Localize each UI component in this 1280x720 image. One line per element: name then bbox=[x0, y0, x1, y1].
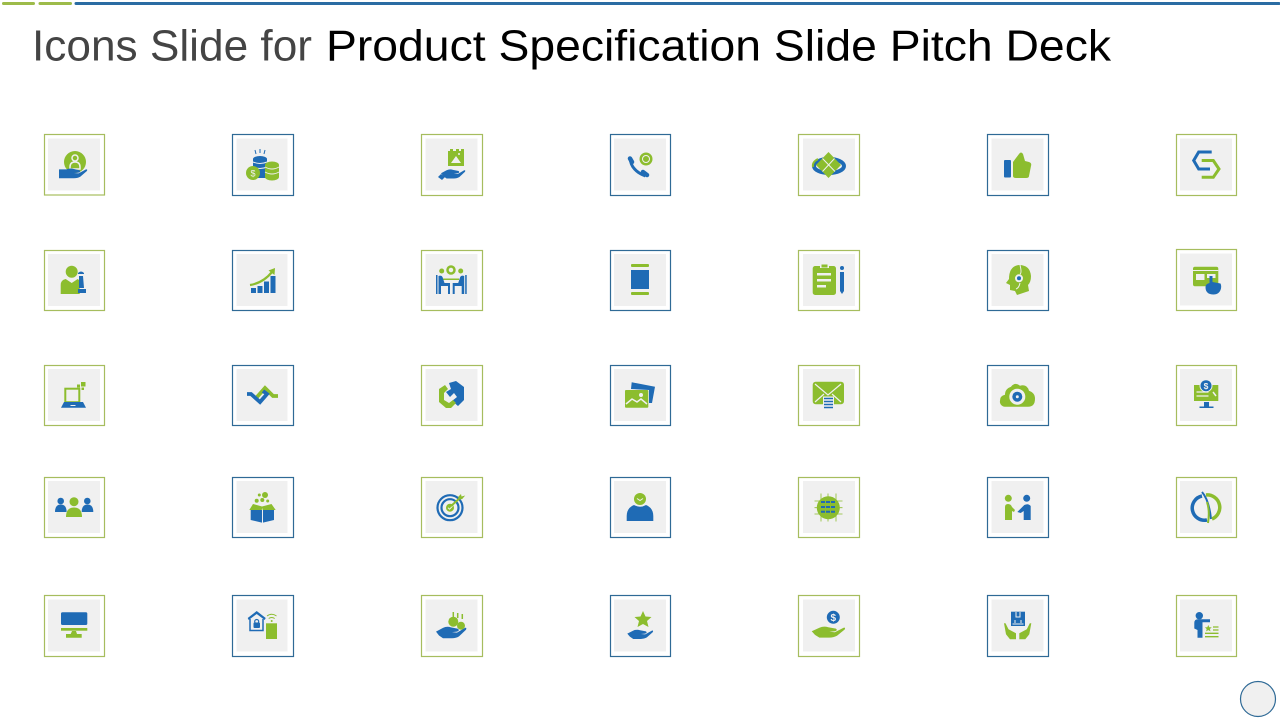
icon: phone with gear bbox=[610, 134, 670, 196]
icon: hand holding star bbox=[610, 596, 670, 656]
page number circle bbox=[1240, 682, 1276, 716]
icon: browser with pointing hand bbox=[1176, 250, 1236, 310]
icon: monitor with dollar coin: $ bbox=[1204, 381, 1209, 391]
icon: headset support head bbox=[988, 250, 1048, 310]
icon: hand with dollar coin bbox=[798, 596, 860, 656]
icon: diamonds over ellipse bbox=[798, 134, 860, 196]
title: Product Specification Slide Pitch Deck bbox=[326, 22, 1112, 70]
icon: hand holding user bbox=[44, 134, 104, 195]
icon: hand holding calendar image bbox=[422, 134, 482, 196]
icon: photo cards with star bbox=[610, 366, 670, 426]
icon: interlinked zigzag arrows bbox=[232, 366, 294, 426]
icon: clipboard and pen bbox=[798, 250, 860, 310]
icon: person with chess piece bbox=[44, 250, 104, 310]
icon: monitor with dollar coin bbox=[1176, 366, 1236, 426]
icon: cloud with gear bbox=[988, 366, 1048, 426]
icon: hands holding parcel bbox=[988, 596, 1048, 656]
icon: hand with dollar coin: $ bbox=[831, 613, 837, 624]
icon: open box with dots bbox=[232, 478, 294, 538]
icon: two people shaking hands bbox=[988, 478, 1048, 538]
icon: meeting table with chairs bbox=[422, 250, 482, 310]
icon: envelope with list bbox=[798, 366, 860, 426]
icon: coin stacks with dollar: $ bbox=[250, 168, 256, 178]
icon: target with arrow bbox=[422, 478, 482, 538]
icon: presenter with list bbox=[1176, 596, 1236, 656]
icon: hexagon arrows bbox=[422, 366, 482, 426]
icon: coin stacks with dollar bbox=[232, 134, 294, 196]
icon: circuit chip with list bbox=[798, 478, 860, 538]
icon: thumbs up bbox=[988, 134, 1048, 196]
icon: hexagonal S bbox=[1176, 134, 1236, 196]
icon: smart home lock with phone bbox=[232, 596, 294, 656]
icon: tablet bbox=[610, 250, 670, 310]
title bbox=[32, 22, 1112, 70]
icon: circular leaf arcs bbox=[1176, 478, 1236, 538]
icon: rising bar chart bbox=[232, 250, 294, 310]
top accent bars bbox=[2, 2, 1280, 5]
icon: person bust bbox=[610, 478, 670, 538]
title: Icons Slide for bbox=[32, 22, 312, 70]
icon: hand with falling coins bbox=[422, 596, 482, 656]
icon: desktop monitor bbox=[44, 596, 104, 656]
icon: three people bbox=[44, 478, 104, 538]
icon: laptop with pixels bbox=[44, 366, 104, 426]
